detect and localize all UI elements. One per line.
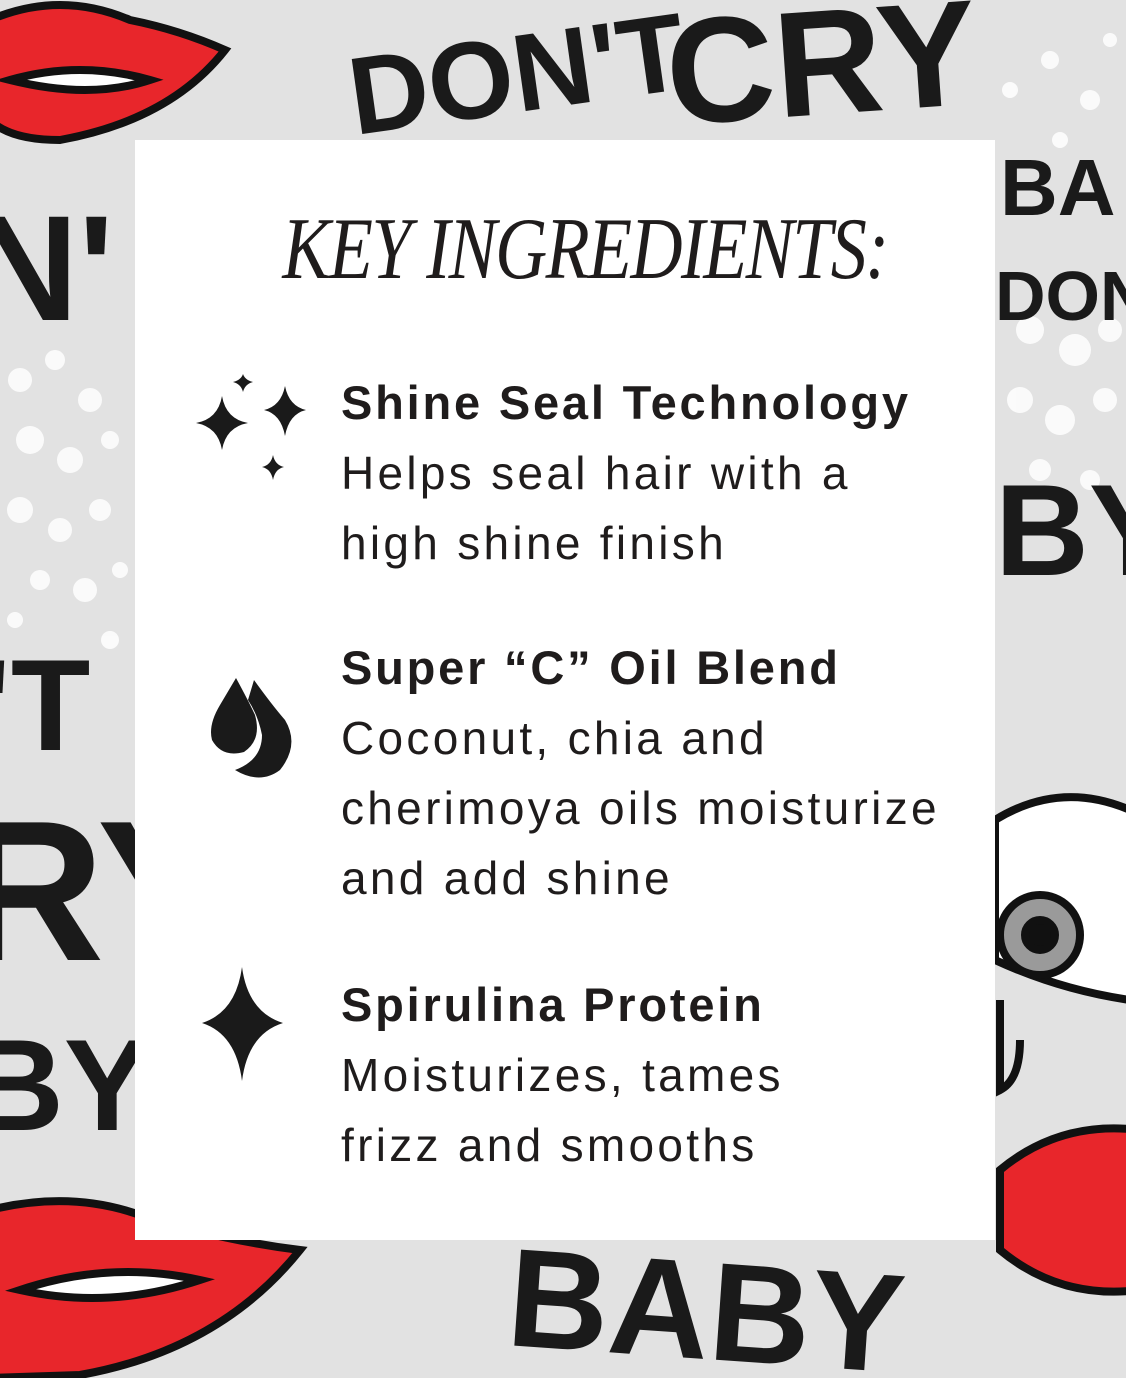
item: Spirulina Protein: frizz and smooths <box>341 1119 758 1171</box>
item: Shine Seal Technology: high shine finish <box>341 517 727 569</box>
icon: oil drops <box>211 678 292 778</box>
item: Shine Seal Technology: Helps seal hair with a <box>341 447 851 499</box>
background decoration: BA <box>1000 143 1116 232</box>
item: Super C Oil Blend: and add shine <box>341 852 673 904</box>
title: KEY INGREDIENTS: <box>282 201 888 298</box>
item: Shine Seal Technology: Shine Seal Technology <box>341 376 911 429</box>
item: Super C Oil Blend <box>341 641 940 904</box>
item: Shine Seal Technology <box>341 376 911 569</box>
panel: white card <box>135 140 995 1240</box>
item: Super C Oil Blend: Coconut, chia and <box>341 712 768 764</box>
icon: sparkles <box>196 374 306 480</box>
eye <box>995 797 1126 1090</box>
item: Super C Oil Blend: Super “C” Oil Blend <box>341 641 841 694</box>
item: Spirulina Protein: Moisturizes, tames <box>341 1049 784 1101</box>
item: Super C Oil Blend: cherimoya oils moisturize <box>341 782 940 834</box>
icon: star <box>202 967 283 1081</box>
item: Spirulina Protein <box>341 978 784 1171</box>
item: Spirulina Protein: Spirulina Protein <box>341 978 765 1031</box>
